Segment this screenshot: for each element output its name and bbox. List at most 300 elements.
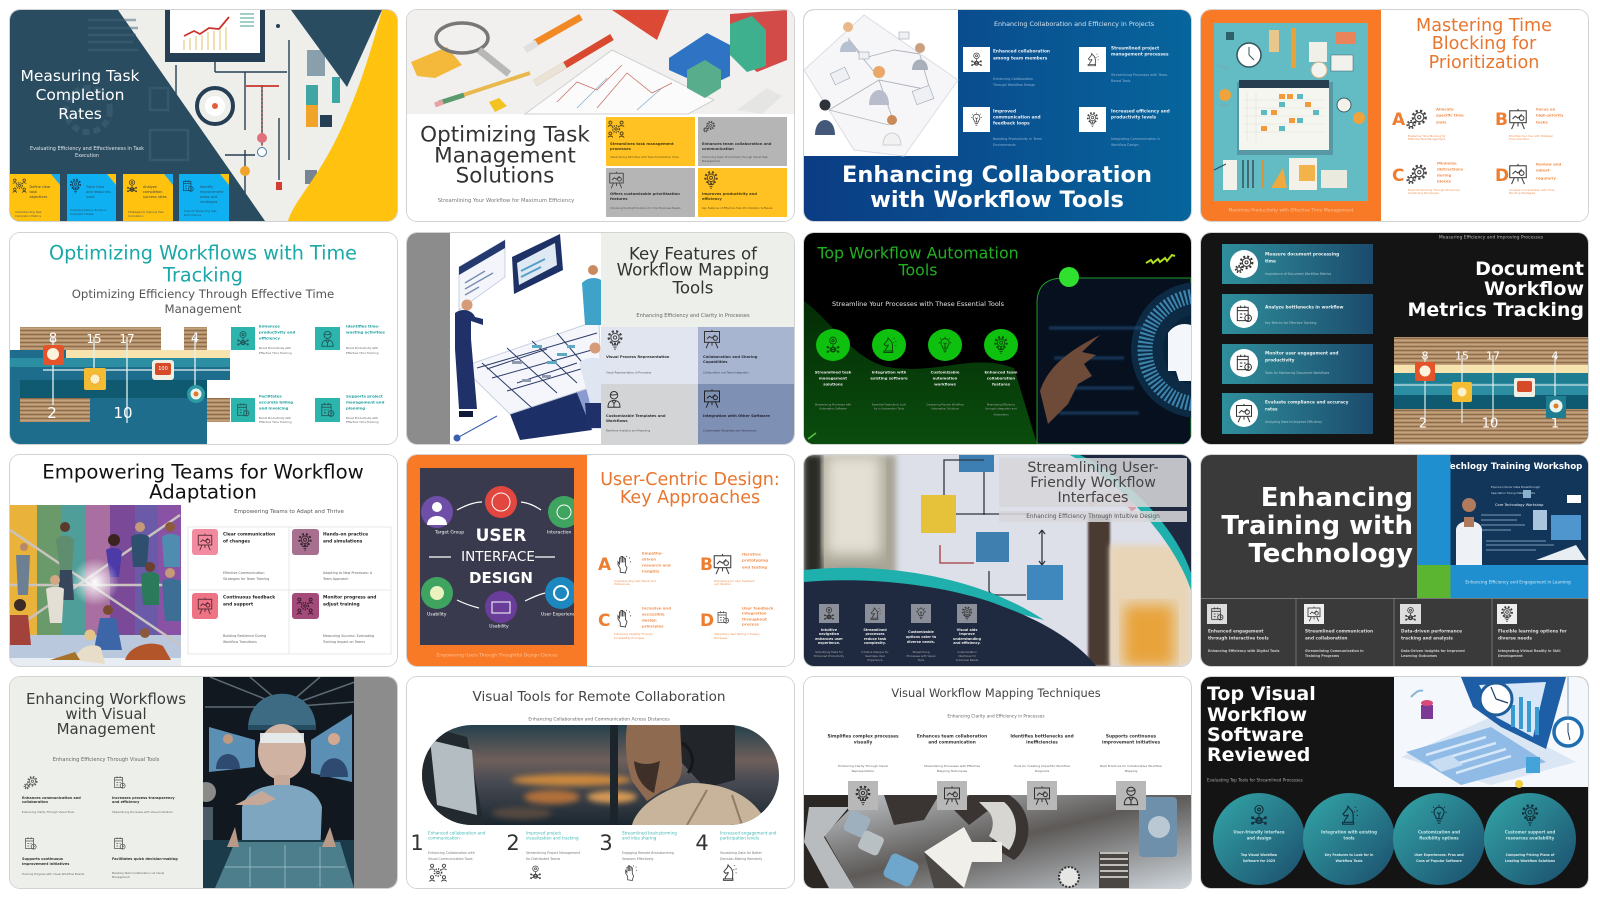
item: accurate billing: Facilitates [259,393,282,398]
feature: intuitive navigation: enhances user [815,637,843,641]
title: Enhancing [1261,483,1413,513]
item 1: 1 [410,831,424,855]
item: continuous improvement [21,837,85,876]
column: streamlined communication: Streamlining Communication in [1305,649,1364,653]
panel: Optimizing Task Management Solutions [407,10,794,221]
title: Measuring Task [20,67,140,85]
column: enhances team collaboration: and communication [928,740,976,746]
title: Tracking [162,263,243,286]
tile: visual process representation [601,326,698,384]
subtitle: Management [164,302,242,316]
item: enhances communication: Enhances communication and [22,796,81,800]
item 4: Increased engagement and [720,830,777,836]
feature: streamlined processes: Intuitive Designs for [861,650,889,654]
item C: accessible [642,612,665,616]
feature: visual aids: Individual Needs [956,658,979,662]
step card: analyze completion: Analyze [143,185,157,189]
panel: Enhancing Training with Technology [1201,455,1588,666]
item 2: for Distributed Teams [526,857,561,861]
item D: adjust [1536,168,1550,172]
item C: during [1437,172,1452,178]
column: flexible learning: Integrating Virtual Reality in Skill [1498,649,1561,653]
step card: identify improvement: Performance [184,213,201,217]
column: identifies bottlenecks: inefficiencies [1026,740,1058,746]
metric card: processing time: Importance of Document Workflow Metrics [1265,272,1331,276]
metric card: user engagement: productivity [1265,357,1295,363]
item: improved communication: Environments [993,143,1016,147]
item: accurate billing: accurate billing [259,399,293,404]
item C [598,606,671,640]
item: increased efficiency: Increased efficiency and [1111,108,1170,114]
timeline illustration [1394,336,1588,444]
item: quick decision-making: Management [112,875,130,879]
item A: insights [642,568,660,574]
tile: clear communication: Strategies for Team Training [223,577,269,581]
feature: intuitive navigation: Simplifying Tasks for [815,650,844,654]
item D: process [742,622,760,626]
title: Blocking for [1432,34,1537,54]
tile: hands-on practice: Hands-on practice [323,532,368,538]
item 3 [599,830,677,880]
step card: analyze completion [123,174,173,221]
item: identifies time-wasting: Identifies time- [346,323,380,328]
title: Streamlining User- [1027,460,1159,476]
metric card: user engagement: Tools for Monitoring Document Workflows [1264,370,1330,374]
panel: Key Features of Workflow Mapping Tools [407,232,794,444]
tile: enhances team collaboration: communication [702,147,734,151]
title [1221,483,1413,569]
item 3: Streamlined brainstorming [622,830,677,836]
circle: user-friendly interface: Software for 2023 [1243,859,1275,863]
image: technology training workshop [1445,455,1588,565]
tile: customizable prioritization: Offers customizable prioritization [610,192,680,196]
illustration: user interface design diagram: DESIGN [469,569,533,587]
dark top right triangle [291,10,382,87]
feature: visual aids: Visual aids [957,628,977,632]
tile: integration with other software: Customizable Templates and Interactions [703,428,757,432]
feature: streamlined processes: Experience [868,658,883,662]
item A: Preferences [614,582,630,586]
item 3: and idea sharing [622,836,657,840]
item D: throughout [742,616,767,622]
item: quick decision-making: Boosting Team Collaboration via Visual [112,871,164,875]
step card: track time: Completion Rates [70,212,94,216]
item B: Prototyping for User Feedback [714,579,755,583]
illustration: hand touching digital interface [1037,278,1267,444]
item D [700,606,774,640]
column: enhances team collaboration [917,734,987,810]
tile: visual process representation: Visual Representation of Processes [606,370,652,374]
blue block [1417,455,1588,598]
column: simplifies complex processes: Enhancing Clarity Through Visual [838,764,888,768]
feature: customizable automation workflows: Customizable [931,369,960,374]
item D: D [700,611,714,631]
feature: visual aids: improve [959,632,976,636]
step card: analyze completion: completion [143,190,163,194]
circle: customization and flexibility [1393,793,1485,885]
subtitle: Enhancing Collaboration and Communication Across Distances [528,716,670,722]
tile: collaboration and sharing [698,326,794,384]
step card: track time: used [86,195,94,199]
column: enhanced engagement [1207,604,1279,653]
item B: Focus on [1536,106,1556,112]
item: streamlined project management [1079,46,1169,83]
item D: Review and [1536,162,1561,166]
tile: continuous feedback: Building Resilience During [223,634,266,638]
circle: customer support: Leading Workflow Solutions [1505,859,1555,863]
metric card: compliance [1222,392,1373,434]
item C: Boost Productivity Through Structured [1408,188,1460,192]
subtitle: Enhancing Collaboration and Efficiency in Projects [994,20,1155,28]
panel: Top Workflow Automation Tools [804,232,1191,444]
step card: define objectives: Define clear [30,185,51,189]
item B: and testing [742,564,767,570]
tile: hands-on practice: Adapting to New Processes: A [323,571,373,575]
panel: Top Visual Workflow Software Reviewed [1201,677,1588,888]
title [1416,16,1552,73]
tile: continuous feedback: Workflow Transitions [223,640,257,644]
illustration: user interface design diagram: Usability [489,624,509,630]
item C: blocks [1437,178,1452,184]
panel: Enhancing Workflows with Visual Management [10,677,397,888]
tile: collaboration and sharing: Collaboration and Sharing [703,354,758,358]
step card: track time: and resources [86,190,111,194]
item B: Prioritize Your Day with Strategic [1509,134,1554,138]
item: enhances productivity: Boost Productivity with [259,346,291,350]
title: Adaptation [149,480,257,504]
feature: enhanced team collaboration: Automation [993,412,1009,416]
panel: Visual Tools for Remote Collaboration [407,677,794,888]
illustration: isometric workflow table [454,234,601,441]
image: technology training workshop: Core Technology Workshop [1495,503,1544,507]
subtitle: Streamlining Your Workflow for Maximum Efficiency [438,198,574,204]
tile: customizable prioritization [606,168,695,217]
item: supports project management: Boost Productivity with [346,416,378,420]
column: identifies bottlenecks: Diagrams [1035,769,1050,773]
subtitle: Optimizing Efficiency Through Effective Time [72,286,334,300]
column: simplifies complex processes: Simplifies complex processes [827,734,899,740]
step card: analyze completion: success rates [143,195,167,199]
column: enhanced engagement: Enhancing Efficiency with Digital Tools [1208,649,1279,653]
feature: streamlined processes: Seamless User [865,654,886,658]
metric card: bottlenecks: Key Metrics for Effective Tracking [1265,320,1316,324]
step card: identify improvement [179,174,229,221]
dark diagonal panel [10,10,265,221]
item: increases transparency: and efficiency [112,800,140,804]
feature: visual aids: Interfaces for [958,654,977,658]
circle: customer support: Customer support and [1505,830,1555,834]
faded icons on panel [66,20,188,160]
teal curve top right [1070,455,1191,590]
timeline illustration: 15 [1455,349,1469,362]
title: Interfaces [1058,490,1128,506]
item A: specific time [1436,112,1464,118]
illustration: user interface design diagram: Interaction [547,530,572,536]
title: Training with [1221,511,1413,541]
teal wave [804,568,1044,620]
item D: User feedback [742,606,774,610]
timeline illustration: 4 [191,331,199,346]
circle: user-friendly interface: and design [1247,836,1272,840]
item 2: Improved project [526,830,561,836]
title: Key Features of [629,244,758,263]
item 3: 3 [599,831,613,855]
tile: streamlines task management: Streamlining Workflow with Task Prioritization Tools [610,155,679,159]
item: increased efficiency: productivity levels [1111,114,1157,120]
item: continuous improvement: improvement initiatives [22,862,69,866]
item 3: Sessions Effectively [622,857,654,861]
step card: identify improvement: strategies [200,200,218,204]
item A: Mastering Time Blocking for [1408,134,1446,138]
item: enhanced collaboration [963,47,1050,87]
title [42,460,364,504]
column: identifies bottlenecks: Tools for Creating Impactful Workflow [1013,764,1071,768]
column: streamlined communication: and collaboration [1305,636,1347,642]
image: technology training workshop: Techlogy Training Workshop [1445,462,1582,472]
subtitle [72,286,334,316]
title: Key Approaches [620,488,760,508]
column: supports continuous improvement: Best Practices for Collaborative Workflow [1100,764,1162,768]
item B [700,552,768,586]
title: Tools [898,260,937,279]
tile: streamlines task management: processes [610,147,632,151]
tile: customizable templates: Customizable Templates and [606,414,666,418]
top caption: Measuring Efficiency and Improving Processes [1439,234,1544,240]
panel: Streamlining User-Friendly Workflow Interfaces [804,455,1191,666]
title: Prioritization [1429,53,1539,73]
column: enhances team collaboration: Mapping Techniques [937,769,968,773]
step card: define objectives: Completion Metrics [15,214,42,218]
column: data-driven performance: tracking and analysis [1401,636,1453,642]
item A: Understanding User Needs and [614,579,656,583]
item 4: Visualizing Data for Better [720,851,763,855]
tile: streamlines task management: Streamlines task management [610,142,674,146]
column: data-driven performance: Data-driven performance [1401,628,1462,634]
circle: integration with existing tools: Workflow Tools [1335,859,1363,863]
feature: intuitive navigation: navigation [819,632,840,636]
feature: visual aids: Customization [957,650,977,654]
title: User-Centric Design: [600,470,780,490]
title [1027,460,1159,506]
feature: streamlined processes: reduce task [864,637,887,641]
column: streamlined communication: Training Programs [1305,654,1339,658]
timeline illustration: 8 [1422,349,1428,362]
column: identifies bottlenecks: Identifies bottlenecks and [1010,734,1074,740]
circle: customer support [1484,793,1576,885]
tile: collaboration and sharing: Capabilities [703,360,728,364]
item B: Iterative [742,552,761,556]
tile: visual process representation: Visual Process Representation [606,354,670,358]
item: increases transparency: Increases process transparency [112,796,175,800]
photo: whiteboard with sticky notes [804,452,1191,666]
metric card: compliance: Analyzing Data to Improve Efficiency [1265,420,1322,424]
panel: Document Workflow Metrics Tracking [1201,232,1588,444]
subtitle banner [999,511,1187,522]
circle: integration with existing tools [1303,793,1395,885]
caption: Enhancing Efficiency and Engagement in Learning [1465,580,1571,584]
subtitle: Execution [75,153,99,159]
item A: A [598,555,612,575]
feature: enhanced team collaboration [984,328,1018,416]
tile: clear communication: Effective Communication [223,571,264,575]
feature: enhanced team collaboration: Maximizing Efficiency [987,402,1015,406]
title banner [999,458,1187,507]
item: improved communication [963,107,1042,147]
tile: customizable prioritization: features [610,197,628,201]
item B: prototyping [742,558,768,562]
item A: Allocate [1436,106,1454,112]
feature: streamlined task management: management [819,375,847,380]
title: Empowering Teams for Workflow [42,460,364,484]
item C: C [598,611,610,631]
subtitle: Streamline Your Processes with These Essential Tools [832,300,1005,308]
title [600,470,780,508]
orange sidebar [407,455,587,666]
item: continuous improvement: Tracking Progress with Visual Workflow Boards [21,872,85,876]
title: Mastering Time [1416,16,1552,36]
feature: intuitive navigation: Enhanced Productivity [814,654,844,658]
timeline illustration: 4 [1552,349,1558,362]
item C: Minimize [1437,160,1457,166]
item: enhances communication: Enhancing Clarity Through Visual Tools [22,810,75,814]
subtitle: Evaluating Top Tools for Streamlined Processes [1207,778,1303,782]
illustration: isometric laptop and clocks [1394,677,1588,788]
title: Enhancing Workflows [26,690,186,708]
timeline illustration: 10 [113,404,133,422]
timeline illustration: 2 [47,404,57,422]
title: Reviewed [1207,744,1310,766]
item: enhanced collaboration: Enhanced collaboration [993,48,1050,54]
item D: regularly [1536,176,1556,180]
item: continuous improvement: Supports continuous [22,857,63,861]
circle: integration with existing tools: Key Features to Look for in [1325,853,1374,857]
feature: streamlined task management [815,328,852,410]
title: Visual Tools for Remote Collaboration [472,689,726,705]
timeline illustration: 15 [86,332,102,346]
panel: Visual Workflow Mapping Techniques [804,677,1191,888]
feature: customizable options: Processes with Visual [907,654,936,658]
item C: Accessibility Principles [614,636,645,640]
tile: improves productivity: Key Features of Effective Task Prioritization Software [702,206,773,210]
title: Enhancing Collaboration [842,162,1152,188]
subtitle: Evaluating Efficiency and Effectiveness in Task [30,146,144,152]
item: enhances communication: collaboration [22,800,49,804]
title: Completion [36,86,124,104]
title: Rates [58,105,102,123]
item B: B [700,555,713,575]
step card: define objectives: objectives [30,195,47,199]
corner accent [808,432,816,438]
metric card: user engagement [1222,344,1373,384]
tile: hands-on practice: and simulations [323,538,363,544]
column: supports continuous improvement: improvement initiatives [1102,740,1160,746]
title: Friendly Workflow [1030,475,1156,491]
item A: Empathy- [642,550,663,556]
item 4: Decision-Making Remotely [720,857,762,861]
item B: B [1495,110,1508,130]
feature: customizable options [906,604,937,662]
title [617,244,769,297]
column: streamlined communication: Streamlined communication [1305,628,1373,634]
green node [1059,266,1079,286]
tile: integration with other software: Integration with Other Software [703,414,770,418]
column: flexible learning: Development [1498,654,1523,658]
feature: streamlined task management: solutions [823,381,844,386]
item 1: Visual Communication Tools [428,857,473,861]
feature: streamlined processes: Streamlined [863,628,887,632]
title [1207,683,1316,766]
tile: enhances team collaboration: Management [702,159,720,163]
photo: man with headset in a stadium frame [422,725,779,825]
feature: enhanced team collaboration: collaboration [987,375,1015,380]
tile: continuous feedback: Continuous feedback [223,594,275,600]
item: increased efficiency [1079,107,1170,147]
image: technology training workshop: Explore Interior Data Breakthrough [1491,485,1540,489]
item: enhances productivity: Effective Time Tracking [259,350,292,354]
tile: collaboration and sharing: Collaboration and Team Integration [703,370,749,374]
item D: integration [742,610,767,616]
tile: improves productivity [698,168,787,217]
feature: integration with existing software: for in Automation Tools [874,406,905,410]
title: Workflow [1207,704,1307,726]
title: Top Visual [1207,683,1316,705]
circle: user-friendly interface: Top Visual Workflow [1241,853,1277,857]
title: Top Workflow Automation [816,243,1019,262]
feature: streamlined task management: Streamlining Processes with [815,402,852,406]
feature: customizable automation workflows [926,328,965,410]
tile: streamlines task management [606,117,695,166]
subtitle: Enhancing Clarity and Efficiency in Processes [947,714,1045,720]
title: Software [1207,724,1304,746]
item 1: Enhanced collaboration and [428,830,486,836]
grey side bar [407,232,450,444]
column: simplifies complex processes: visually [854,740,872,746]
item: supports project management: management and [346,399,385,404]
item: identifies time-wasting [315,323,385,354]
subtitle: Empowering Teams to Adapt and Thrive [234,509,345,515]
illustration: user interface design diagram: Target Group [434,530,464,536]
item B: high-priority [1536,112,1564,118]
item A [1392,106,1464,141]
item: enhanced collaboration: Enhancing Collaboration [993,77,1033,81]
feature: customizable options: Tools [917,658,925,662]
item: improved communication: Improved [993,108,1016,114]
metric card: compliance: rates [1265,406,1278,412]
title: Optimizing Task [420,122,590,148]
step card: identify improvement: improvement [200,190,224,194]
illustration: user interface design diagram: User Experience [541,612,578,618]
circle: user-friendly interface: User-friendly interface [1233,830,1285,834]
title: Visual Workflow Mapping Techniques [891,686,1101,700]
item C [1392,160,1464,195]
item: streamlined project management: Streamlined project [1111,46,1159,52]
subtitle: Enhancing Efficiency Through Visual Tools [53,757,160,763]
feature: customizable automation workflows: workflows [934,381,957,386]
step card: analyze completion: Completion [128,214,144,218]
green background wave [804,300,1037,444]
panel: User-Centric Design Key Approaches [407,455,794,666]
feature: customizable automation workflows: Comparing Popular Workflow [926,402,965,406]
item A: driven [642,556,656,562]
title [49,241,357,286]
illustration: user interface design diagram: USER [476,526,526,546]
illustration: diverse team with coloured stripes [10,505,181,666]
column: flexible learning: diverse needs [1498,636,1532,642]
item: accurate billing: and invoicing [259,405,289,410]
tile: monitor progress: Training Impact on Teams [322,640,365,644]
feature: customizable options: Streamlining [912,650,930,654]
metric card: processing time: time [1265,258,1276,264]
